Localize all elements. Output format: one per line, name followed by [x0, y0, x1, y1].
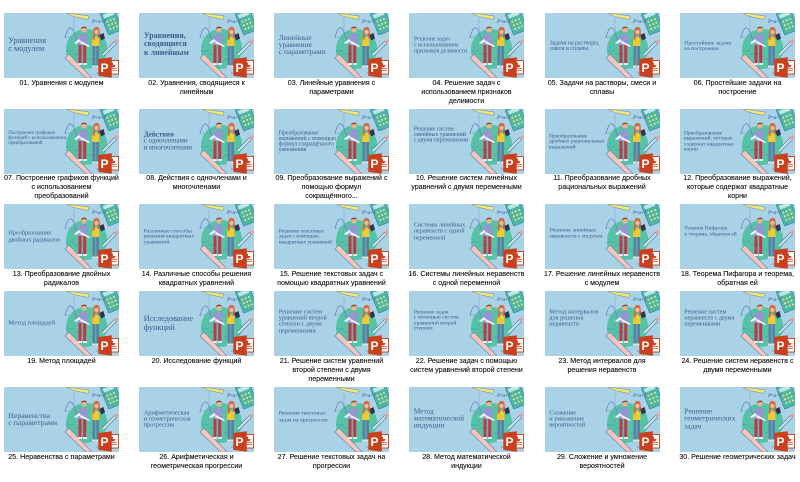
caption 04: [421, 78, 512, 105]
caption 27: [266, 452, 397, 471]
caption 15: 15. Решение текстовых задач с: [280, 270, 383, 278]
slide 12: P=a+T: [768, 116, 783, 121]
slide 07: P=a+T: [92, 116, 107, 121]
slide 07: преобразований: [8, 141, 43, 146]
card 27: [274, 387, 389, 477]
caption 17: 17. Решение линейных неравенств: [544, 270, 660, 278]
slide 21: P: [370, 339, 379, 353]
caption 17: [536, 270, 668, 288]
slide 28: математической: [414, 414, 464, 423]
caption 06: построение: [718, 88, 757, 96]
slide 11: Преобразование: [548, 132, 587, 139]
slide 10: линейных уравнений: [414, 131, 466, 138]
slide 20: функций: [144, 323, 175, 332]
slide 09: формул сокращённого: [279, 140, 334, 147]
slide 09: умножения: [279, 147, 307, 153]
caption 14: 14. Различные способы решения: [142, 270, 251, 278]
slide 12: выражений, которые: [684, 134, 733, 141]
caption 15: помощью квадратных уравнений: [277, 279, 386, 287]
caption 13: 13. Преобразование двойных: [13, 270, 110, 278]
caption 24: двумя переменными: [703, 366, 772, 374]
card 24: [680, 291, 795, 381]
caption 07: [4, 174, 119, 200]
slide 15: [274, 204, 389, 269]
caption 21: 21. Решение систем уравнений: [280, 356, 383, 364]
slide 27: Решение текстовых: [279, 410, 326, 416]
slide 04: признаков делимости: [414, 48, 467, 54]
caption 11: [553, 174, 651, 191]
caption 04: использованием признаков: [421, 88, 512, 96]
slide 11: P=a+T: [632, 116, 647, 121]
caption 01: 01. Уравнения с модулем: [20, 78, 103, 86]
slide 05: Задачи на растворы,: [549, 40, 600, 46]
caption 23: 23. Метод интервалов для: [558, 356, 646, 364]
slide 04: P: [506, 61, 514, 75]
slide 07: P: [100, 157, 109, 171]
slide 24: P=a+T: [768, 298, 783, 303]
slide 22: [409, 291, 524, 356]
slide 08: P: [236, 157, 244, 171]
caption 13: радикалов: [44, 279, 79, 287]
slide 23: P: [641, 339, 649, 353]
card 18: [680, 204, 795, 294]
slide 04: Решение задач: [414, 36, 450, 42]
slide 01: [4, 13, 119, 78]
slide 16: неравенств с одной: [414, 228, 465, 235]
slide 28: Метод: [414, 407, 434, 416]
slide 24: неравенств с двумя: [684, 316, 734, 322]
slide 22: с помощью систем: [414, 314, 459, 320]
slide 29: и умножение: [549, 416, 584, 422]
slide 13: двойных радикалов: [8, 237, 60, 244]
caption 12: которые содержат квадратные: [687, 183, 788, 191]
caption 16: [401, 270, 532, 288]
caption 07: преобразований: [34, 192, 89, 200]
slide 21: [274, 291, 389, 356]
slide 14: P=a+T: [227, 211, 242, 216]
slide 24: P: [776, 339, 785, 353]
slide 30: [680, 387, 795, 452]
slide 20: P=a+T: [227, 298, 242, 303]
slide 09: [274, 109, 389, 174]
slide 21: P=a+T: [362, 298, 377, 303]
slide 02: сводящиеся: [144, 39, 188, 48]
slide 25: [4, 387, 119, 452]
slide 07: [4, 109, 119, 174]
slide 23: неравенств: [549, 320, 579, 328]
slide 11: выражений: [548, 143, 575, 150]
caption 14: [131, 270, 262, 288]
card 17: [544, 204, 660, 294]
slide 22: степени: [414, 325, 433, 331]
slide 10: P: [506, 157, 514, 171]
caption 28: индукции: [451, 462, 482, 470]
slide 28: P: [506, 435, 514, 449]
caption 18: 18. Теорема Пифагора и теорема,: [681, 270, 794, 278]
caption 13: [13, 270, 110, 287]
slide 09: P: [370, 157, 379, 171]
slide 21: степени с двумя: [279, 320, 322, 328]
slide 10: [409, 109, 524, 174]
slide 29: Сложение: [549, 410, 576, 416]
slide 12: P: [776, 157, 785, 171]
slide 21: уравнений второй: [279, 314, 328, 322]
slide 30: задач: [684, 422, 701, 431]
slide 19: [4, 291, 119, 356]
slide 06: на построение: [684, 46, 719, 52]
slide 25: P: [100, 435, 109, 449]
card 02: [139, 13, 254, 96]
card 19: [4, 291, 119, 381]
slide 09: выражений с помощью: [279, 135, 337, 142]
slide 02: P: [236, 61, 244, 75]
slide 06: P=a+T: [768, 20, 783, 25]
caption 18: [672, 270, 800, 288]
slide 18: Теорема Пифагора: [684, 225, 728, 232]
caption 26: [131, 452, 262, 471]
caption 15: [266, 270, 397, 288]
card 07: [4, 109, 119, 200]
slide 16: P: [506, 252, 514, 266]
caption 03: 03. Линейные уравнения с: [288, 78, 375, 86]
slide 27: [274, 387, 389, 452]
slide 03: с параметрами: [279, 47, 326, 56]
card 21: [274, 291, 389, 381]
slide 13: [4, 204, 119, 269]
caption 02: линейным: [180, 88, 213, 96]
slide 17: P=a+T: [632, 211, 647, 216]
card 05: [545, 13, 660, 96]
slide 08: Действия: [144, 130, 174, 138]
caption 26: 26. Арифметическая и: [159, 452, 234, 460]
slide 15: P=a+T: [362, 211, 377, 216]
caption 05: 05. Задачи на растворы, смеси и: [548, 78, 656, 86]
caption 30: 30. Решение геометрических задач: [679, 452, 796, 460]
caption 10: [411, 174, 522, 191]
card 23: [544, 291, 660, 381]
caption 10: уравнений с двумя переменными: [411, 183, 522, 191]
caption 05: [548, 78, 656, 96]
slide 22: уравнений второй: [414, 319, 457, 326]
slide 02: P=a+T: [227, 20, 242, 25]
slide 04: P=a+T: [497, 20, 512, 25]
slide 30: P=a+T: [768, 394, 783, 399]
card 08: [139, 109, 254, 191]
slide 27: P=a+T: [362, 394, 377, 399]
slide 05: P: [641, 61, 649, 75]
slide 12: содержат квадратные: [684, 141, 734, 147]
caption 14: квадратных уравнений: [159, 279, 234, 287]
slide 13: Преобразование: [8, 230, 51, 237]
caption 08: многочленами: [173, 183, 220, 191]
caption 26: геометрическая прогрессии: [151, 462, 242, 470]
slide 14: решения квадратных: [144, 234, 194, 240]
caption 06: 06. Простейшие задачи на: [694, 78, 781, 86]
caption 05: сплавы: [590, 88, 614, 96]
slide 17: P: [641, 252, 649, 266]
slide 22: Решение задач: [414, 309, 449, 315]
slide 08: P=a+T: [227, 116, 242, 121]
slide 09: P=a+T: [362, 116, 377, 121]
caption 29: [536, 452, 668, 471]
slide 29: вероятностей: [549, 422, 585, 428]
slide 16: [409, 204, 524, 269]
caption 16: 16. Системы линейных неравенств: [409, 270, 524, 278]
slide 13: P=a+T: [92, 211, 107, 216]
caption 29: вероятностей: [579, 462, 625, 470]
caption 02: [148, 78, 245, 96]
slide 03: Линейные: [279, 33, 312, 42]
card 11: [545, 109, 660, 191]
card 06: [680, 13, 795, 96]
card 16: [409, 204, 524, 294]
caption 04: 04. Решение задач с: [433, 78, 500, 86]
slide 23: P=a+T: [632, 298, 647, 303]
slide 11: дробных рациональных: [548, 137, 605, 144]
slide 30: Решение: [684, 407, 713, 416]
slide 08: [139, 109, 254, 174]
slide 12: [680, 109, 795, 174]
slide 20: [139, 291, 254, 356]
caption 11: 11. Преобразование дробных: [553, 174, 651, 182]
slide 13: P: [100, 252, 109, 266]
slide 11: [545, 109, 660, 174]
caption 21: переменными: [308, 375, 355, 383]
slide 17: неравенств с модулем: [549, 234, 603, 240]
slide 20: P: [236, 339, 244, 353]
slide 28: P=a+T: [497, 394, 512, 399]
slide 22: P: [506, 339, 514, 353]
card 14: [139, 204, 254, 287]
caption 03: параметрами: [309, 88, 354, 96]
slide 02: Уравнения,: [144, 31, 186, 40]
slide 29: P: [641, 435, 649, 449]
slide 16: P=a+T: [497, 211, 512, 216]
slide 12: корни: [684, 146, 698, 152]
slide 02: к линейным: [144, 48, 189, 57]
slide 30: геометрических: [684, 414, 736, 423]
slide 23: [544, 291, 660, 356]
slide 18: P: [776, 252, 785, 266]
caption 22: систем уравнений второй степени: [410, 366, 523, 374]
caption 29: 29. Сложение и умножение: [557, 452, 647, 460]
slide 05: смеси и сплавы: [549, 46, 588, 52]
slide 22: P=a+T: [497, 298, 512, 303]
slide 01: P: [100, 61, 109, 75]
slide 26: P=a+T: [227, 394, 242, 399]
caption 12: 12. Преобразование выражений,: [683, 174, 792, 182]
slide 08: с одночленами: [144, 136, 188, 144]
slide 15: Решение текстовых: [279, 229, 325, 235]
slide 16: Системы линейных: [414, 222, 466, 229]
slide 10: с двумя переменными: [414, 137, 468, 143]
slide 25: P=a+T: [92, 394, 107, 399]
slide 27: задач на прогрессии: [279, 417, 328, 423]
card 28: [409, 387, 524, 477]
slide 18: P=a+T: [768, 211, 783, 216]
caption 11: рациональных выражений: [558, 183, 646, 191]
slide 10: P=a+T: [497, 116, 512, 121]
slide 06: Простейшие задачи: [684, 40, 731, 46]
caption 09: помощью формул: [302, 183, 361, 191]
slide 25: Неравенства: [8, 411, 50, 420]
caption 28: [401, 452, 532, 471]
slide 30: P: [776, 435, 785, 449]
caption 18: обратная ей: [717, 279, 758, 287]
slide 05: [545, 13, 660, 78]
slide 23: Метод интервалов: [549, 308, 598, 316]
slide 14: уравнений: [144, 239, 169, 246]
caption 08: [146, 174, 247, 191]
caption 25: 25. Неравенства с параметрами: [8, 452, 115, 460]
caption 17: с модулем: [585, 279, 619, 287]
caption 02: 02. Уравнения, сводящиеся к: [148, 78, 245, 86]
caption 04: делимости: [449, 97, 484, 105]
caption 07: 07. Построение графиков функций: [4, 174, 119, 182]
slide 12: Преобразование: [684, 129, 723, 136]
caption 09: 09. Преобразование выражений с: [276, 174, 388, 182]
caption 23: [536, 356, 668, 375]
slide 21: Решение систем: [279, 308, 322, 316]
slide 21: переменными: [279, 328, 317, 334]
caption 08: 08. Действия с одночленами и: [146, 174, 247, 182]
slide 18: и теорема, обратная ей: [684, 231, 737, 238]
slide 07: Построение графиков: [8, 131, 55, 136]
slide 17: Решение линейных: [549, 227, 596, 234]
slide 26: Арифметическая: [144, 410, 189, 416]
card 20: [139, 291, 254, 381]
slide 04: [409, 13, 524, 78]
caption 12: [683, 174, 792, 200]
caption 21: [266, 356, 397, 384]
caption 27: 27. Решение текстовых задач на: [278, 452, 385, 460]
slide 15: P: [370, 252, 379, 266]
slide 14: P: [236, 252, 244, 266]
caption 23: решения неравенств: [567, 366, 637, 374]
caption 22: [401, 356, 532, 375]
card 12: [680, 109, 795, 200]
card 01: [4, 13, 119, 86]
caption 09: [276, 174, 388, 200]
caption 21: второй степени с двумя: [292, 366, 371, 374]
slide 01: с модулем: [8, 44, 45, 53]
slide 17: [544, 204, 660, 269]
card 15: [274, 204, 389, 294]
slide 19: P: [100, 339, 109, 353]
caption 06: [694, 78, 782, 96]
slide 01: Уравнения: [8, 36, 46, 45]
slide 24: переменными: [684, 322, 721, 328]
card 09: [274, 109, 389, 200]
slide 04: с использованием: [414, 42, 458, 48]
slide 28: индукции: [414, 421, 445, 430]
slide 03: уравнения: [279, 40, 312, 49]
slide 23: для решения: [549, 314, 583, 322]
slide 15: задач с помощью: [279, 234, 319, 240]
slide 01: P=a+T: [92, 20, 107, 25]
caption 07: с использованием: [32, 183, 91, 191]
slide 16: переменной: [414, 235, 446, 242]
slide 19: P=a+T: [92, 298, 107, 303]
slide 10: Решение систем: [414, 126, 454, 132]
caption 24: 24. Решение систем неравенств с: [681, 356, 794, 364]
caption 20: 20. Исследование функций: [152, 356, 241, 364]
caption 28: 28. Метод математической: [422, 452, 511, 460]
caption 27: прогрессии: [313, 462, 350, 470]
slide 06: [680, 13, 795, 78]
slide 03: [274, 13, 389, 78]
caption 03: [288, 78, 375, 96]
slide 06: P: [776, 61, 785, 75]
caption 19: 19. Метод площадей: [27, 356, 96, 364]
card 26: [139, 387, 254, 477]
caption 09: сокращённого...: [305, 192, 358, 200]
slide 09: Преобразование: [279, 129, 319, 136]
caption 22: 22. Решение задач с помощью: [416, 356, 517, 364]
caption 12: корни: [728, 192, 747, 200]
slide 02: [139, 13, 254, 78]
slide 03: P: [370, 61, 379, 75]
slide 24: [680, 291, 795, 356]
slide 20: Исследование: [144, 314, 194, 323]
slide 18: [680, 204, 795, 269]
slide 27: P: [370, 435, 379, 449]
slide 14: [139, 204, 254, 269]
slide 29: P=a+T: [632, 394, 647, 399]
slide 26: [139, 387, 254, 452]
slide 07: функций с использованием: [8, 136, 67, 141]
slide 03: P=a+T: [362, 20, 377, 25]
card 13: [4, 204, 119, 287]
slide 24: Решение систем: [684, 310, 726, 316]
card 22: [409, 291, 524, 381]
card 30: [680, 387, 795, 477]
slide 08: и многочленами: [144, 143, 192, 151]
card 04: [409, 13, 524, 105]
card 10: [409, 109, 524, 191]
card 03: [274, 13, 389, 96]
slide 26: P: [236, 435, 244, 449]
caption 24: [672, 356, 800, 375]
caption 16: с одной переменной: [433, 279, 500, 287]
slide 28: [409, 387, 524, 452]
slide 14: Различные способы: [144, 228, 192, 235]
slide 25: с параметрами: [8, 418, 57, 427]
slide 15: квадратных уравнений: [279, 239, 332, 246]
caption 10: 10. Решение систем линейных: [416, 174, 517, 182]
slide 29: [544, 387, 660, 452]
slide 26: и геометрическая: [144, 416, 191, 422]
slide 05: P=a+T: [632, 20, 647, 25]
card 25: [4, 387, 119, 477]
slide 19: Метод площадей: [8, 320, 56, 326]
slide 11: P: [641, 157, 649, 171]
card 29: [544, 387, 660, 477]
slide 26: прогрессии: [144, 422, 175, 428]
